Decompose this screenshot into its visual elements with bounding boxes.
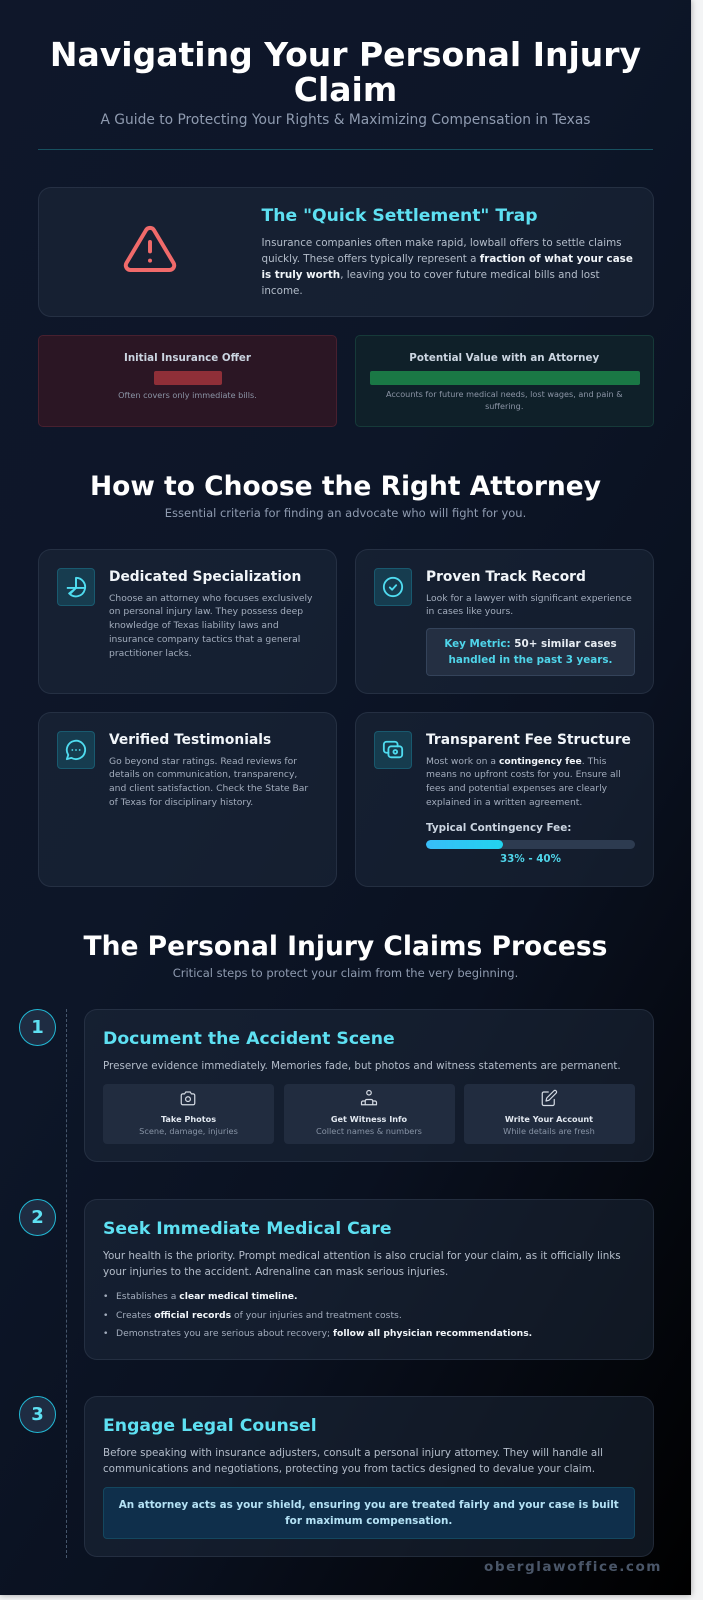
bullet 1: • (103, 1291, 108, 1302)
sub-card: take photos: Scene, damage, injuries (139, 1126, 238, 1136)
title: Claim (294, 70, 397, 109)
subtitle: A Guide to Protecting Your Rights & Maximizing Compensation in Texas (100, 112, 590, 128)
card text: in cases like yours. (426, 606, 513, 617)
trap text: is truly worth, leaving you to cover future medical bills and lost (262, 269, 600, 281)
icon: chat bubble (57, 731, 95, 769)
value note (386, 389, 623, 411)
step title: Seek Immediate Medical Care (103, 1219, 392, 1239)
card text: knowledge of Texas liability laws and (109, 620, 279, 631)
sub-card: write account: While details are fresh (503, 1126, 595, 1136)
card text: Choose an attorney who focuses exclusively (109, 592, 312, 604)
panel: step 2 (84, 1199, 654, 1360)
step text: Before speaking with insurance adjusters, consult a personal injury attorney. They will handle all (103, 1447, 603, 1459)
offer label: Initial Insurance Offer (124, 352, 251, 364)
sub-card: witness info: Get Witness Info (331, 1114, 407, 1124)
card text: of Texas for disciplinary history. (109, 797, 253, 808)
icon: check circle (374, 568, 412, 606)
bullet list (103, 1291, 532, 1339)
icon: cash (374, 731, 412, 769)
icon: witness (360, 1090, 378, 1106)
step number 2: 2 (31, 1207, 44, 1228)
step text (103, 1250, 621, 1278)
subheading: claims process: Critical steps to protect your claim from the very beginning. (173, 966, 518, 980)
callout (103, 1487, 634, 1539)
heading: claims process: The Personal Injury Claims Process (84, 931, 607, 962)
key metric (426, 628, 635, 676)
step text: Your health is the priority. Prompt medical attention is also crucial for your claim, as it officially links (103, 1250, 621, 1262)
panel: verified testimonials (38, 712, 337, 887)
panel: transparent fee structure (355, 712, 654, 887)
card text: Look for a lawyer with significant experience (426, 592, 632, 604)
card text (109, 756, 308, 808)
value bar (370, 371, 640, 385)
heading: choose attorney: How to Choose the Right Attorney (90, 471, 601, 502)
sub-card: write account (464, 1084, 634, 1144)
card text: on personal injury law. They possess deep (109, 606, 303, 617)
value label: Potential Value with an Attorney (409, 352, 599, 364)
sub-card: take photos (103, 1084, 274, 1144)
step text: Preserve evidence immediately. Memories fade, but photos and witness statements are permanent. (103, 1060, 621, 1072)
card text: practitioner lacks. (109, 648, 192, 659)
step title: Engage Legal Counsel (103, 1416, 317, 1436)
icon: camera (180, 1091, 196, 1106)
step text: your injuries to the accident. Adrenaline can mask serious injuries. (103, 1266, 448, 1278)
panel: proven track record (355, 549, 654, 694)
step title: Document the Accident Scene (103, 1029, 395, 1049)
subheading: choose attorney: Essential criteria for finding an advocate who will fight for you. (165, 506, 526, 520)
panel: quick settlement trap (38, 187, 654, 317)
card text: explained in a written agreement. (426, 797, 582, 808)
panel: initial insurance offer (38, 335, 337, 427)
card text: insurance company tactics that a general (109, 634, 300, 645)
bullet 3: • (103, 1328, 108, 1339)
value note: suffering. (485, 401, 523, 411)
card title: Verified Testimonials (109, 732, 271, 748)
fee value: 33% - 40% (500, 853, 561, 865)
sub-card: witness info (284, 1084, 454, 1144)
step number 3: 3 (31, 1404, 44, 1425)
icon: pencil square (542, 1090, 558, 1106)
card text: Most work on a contingency fee. This (426, 756, 606, 766)
bullet 2: • (103, 1310, 108, 1320)
header divider (38, 149, 653, 150)
offer bar (154, 371, 222, 385)
card title: Dedicated Specialization (109, 569, 301, 585)
fee label: Typical Contingency Fee: (426, 822, 571, 834)
panel: step 1 (84, 1009, 654, 1162)
offer note: Often covers only immediate bills. (118, 390, 257, 400)
step number 2 (19, 1199, 56, 1236)
trap text (262, 236, 633, 297)
fee progress bar (426, 840, 635, 849)
callout: for maximum compensation. (285, 1515, 452, 1527)
callout: An attorney acts as your shield, ensuring you are treated fairly and your case is built (119, 1499, 619, 1511)
trap text: quickly. These offers typically represent a fraction of what your case (262, 253, 633, 265)
step text: communications and negotiations, protecting you from tactics designed to devalue your claim. (103, 1463, 595, 1475)
watermark: oberglawoffice.com (484, 1559, 662, 1575)
icon: warning triangle (124, 226, 176, 272)
trap text: income. (262, 285, 303, 297)
sub-card: take photos: Take Photos (161, 1114, 216, 1124)
card text: fees and potential expenses are clearly (426, 783, 607, 794)
trap heading: The "Quick Settlement" Trap (262, 206, 538, 226)
step number 1: 1 (31, 1017, 44, 1038)
step text (103, 1447, 603, 1475)
bullet 2: Creates official records of your injuries and treatment costs. (116, 1310, 402, 1320)
step number 1 (19, 1009, 56, 1046)
card text (426, 592, 632, 617)
title (50, 35, 641, 109)
sub-card: write account: Write Your Account (505, 1114, 593, 1124)
card text: Go beyond star ratings. Read reviews for (109, 756, 297, 766)
value note: Accounts for future medical needs, lost wages, and pain & (386, 389, 623, 399)
card title: Transparent Fee Structure (426, 732, 631, 748)
trap text: Insurance companies often make rapid, lowball offers to settle claims (262, 236, 622, 248)
key metric: handled in the past 3 years. (449, 654, 612, 666)
card text (109, 592, 312, 659)
panel: dedicated specialization (38, 549, 337, 694)
sub-card: witness info: Collect names & numbers (316, 1126, 422, 1136)
title: Navigating Your Personal Injury (50, 35, 641, 74)
card title: Proven Track Record (426, 569, 586, 585)
bullet 1: Establishes a clear medical timeline. (116, 1291, 297, 1302)
card text (426, 756, 621, 808)
bullet 3: Demonstrates you are serious about recovery; follow all physician recommendations. (116, 1328, 532, 1339)
icon: specialization (57, 568, 95, 606)
panel: step 3 (84, 1396, 654, 1557)
card text: details on communication, transparency, (109, 769, 297, 780)
timeline dashed line (66, 1009, 67, 1558)
key metric: Key Metric: 50+ similar cases (444, 638, 617, 650)
card text: means no upfront costs for you. Ensure all (426, 769, 621, 780)
card text: and client satisfaction. Check the State Bar (109, 783, 308, 794)
step number 3 (19, 1396, 56, 1433)
panel: potential value (355, 335, 654, 427)
